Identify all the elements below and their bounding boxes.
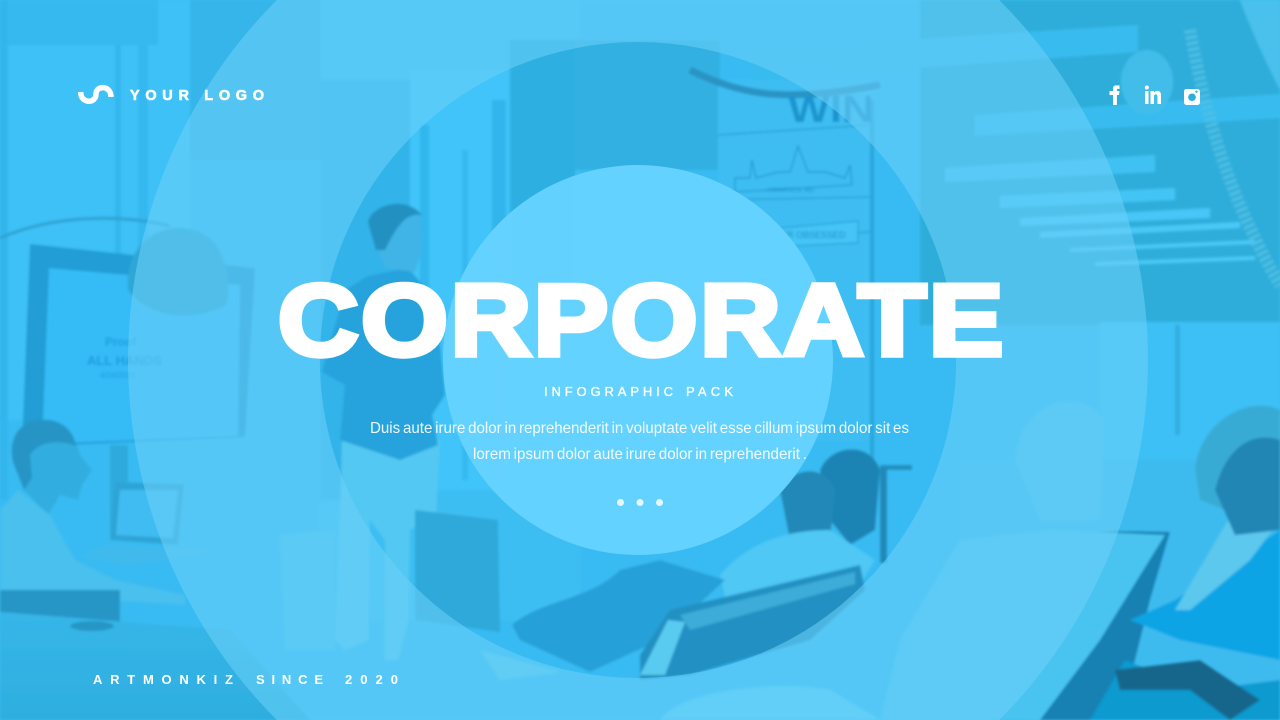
brick wall behind presenter: [320, 0, 720, 620]
wall poster board: [690, 70, 880, 480]
foreground cushion lower left of ring: [660, 686, 880, 720]
title: CORPORATE: [278, 264, 1006, 377]
right foreground chair and people: [880, 401, 1280, 720]
presenter shirt: [322, 268, 445, 460]
footer text: [93, 672, 398, 687]
presenter head: [375, 206, 422, 272]
wall poster board: ANNAPOLIS, MD: [767, 188, 815, 194]
footer text: ARTMONKIZ: [93, 672, 233, 687]
presenter legs: [335, 440, 440, 660]
pagination dots: [617, 499, 663, 506]
wall poster board: ER OBSESSED: [781, 230, 846, 240]
subtitle: [544, 384, 733, 399]
laptop on desk: [80, 482, 220, 565]
obsessed banner: [770, 221, 858, 247]
body text: lorem ipsum dolor aute irure dolor in reprehenderit .: [473, 446, 807, 463]
social icons: [1110, 85, 1200, 105]
body text: [370, 420, 909, 463]
logo: [81, 88, 264, 104]
floor and far room, lower right: [960, 460, 1280, 720]
body text: Duis aute irure dolor in reprehenderit in voluptate velit esse cillum ipsum dolor sit es: [370, 420, 909, 437]
monitor on stand: 4/24/2019: [100, 371, 136, 380]
centre circle: [443, 165, 833, 555]
skyline drawing: [735, 146, 852, 192]
WIN poster lettering: WIN: [788, 89, 874, 131]
icon: instagram: [1184, 89, 1200, 105]
audience men, centre: [480, 449, 912, 680]
logo wordmark: YOUR LOGO: [130, 88, 264, 104]
subtitle: INFOGRAPHIC: [544, 384, 673, 399]
icon: logo squiggle: [81, 88, 111, 101]
seated man, left: [0, 420, 310, 720]
left windows: [0, 0, 330, 500]
icon: facebook: [1110, 85, 1120, 105]
outer translucent ring: [128, 0, 1148, 720]
monitor on stand: [22, 244, 255, 535]
footer text: 2020: [345, 672, 398, 687]
right ceiling and beams: [750, 0, 1280, 462]
presenter: [322, 204, 445, 660]
subtitle: PACK: [686, 384, 733, 399]
arc floor lamp: [0, 218, 228, 316]
monitor on stand: Proof: [105, 335, 137, 349]
footer text: SINCE: [256, 672, 323, 687]
monitor on stand: ALL HANDS: [87, 353, 162, 368]
icon: linkedin: [1145, 86, 1161, 104]
armchair behind presenter: [280, 510, 500, 650]
